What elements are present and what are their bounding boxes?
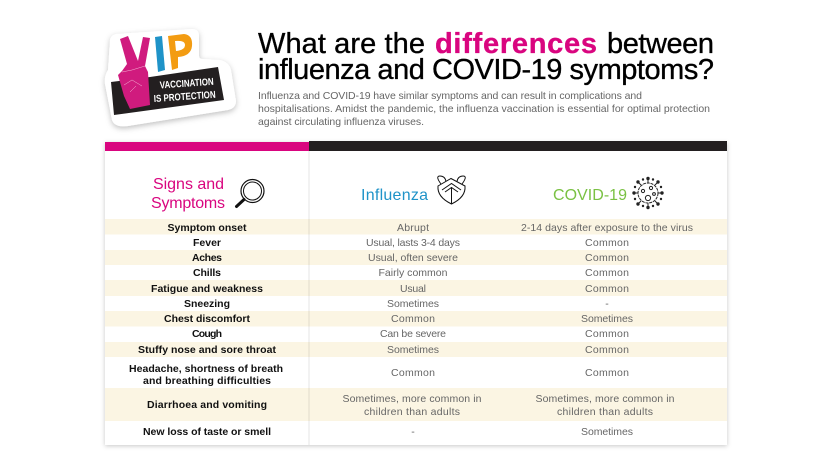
column: signs and symptoms labels: and breathing difficulties	[143, 375, 271, 387]
heading: influenza: Influenza	[361, 187, 428, 204]
header bar pink	[105, 142, 309, 151]
column: covid-19 values: children than adults	[557, 406, 653, 418]
column: signs and symptoms labels: Cough	[192, 328, 222, 340]
column: influenza values: Sometimes	[387, 344, 439, 356]
column: covid-19 values: -	[605, 298, 609, 310]
column: signs and symptoms labels: Aches	[192, 252, 222, 264]
column: signs and symptoms labels: Fever	[193, 237, 221, 249]
column: covid-19 values: Common	[585, 237, 629, 249]
header bar black	[309, 141, 727, 151]
title: influenza and COVID-19 symptoms?	[258, 54, 714, 86]
column: influenza values: Usual, often severe	[368, 252, 458, 264]
title: between	[607, 28, 714, 60]
column: covid-19 values: Common	[585, 267, 629, 279]
logo text: VACCINATION	[159, 77, 214, 91]
column: influenza values	[342, 222, 482, 438]
column: covid-19 values	[521, 222, 693, 438]
column: covid-19 values: Common	[585, 252, 629, 264]
intro text	[258, 90, 710, 128]
title: What are the	[258, 28, 425, 60]
panel: comparison table	[105, 141, 727, 445]
logo letter I	[155, 36, 165, 72]
logo letter V and hand	[118, 36, 150, 109]
column: signs and symptoms labels: New loss of taste or smell	[143, 426, 271, 438]
icon: virus	[632, 177, 664, 209]
intro text: against circulating influenza viruses.	[258, 116, 424, 128]
intro text: Influenza and COVID-19 have similar symptoms and can result in complications and	[258, 90, 642, 102]
intro text: hospitalisations. Amidst the pandemic, the influenza vaccination is essential for optimal protection	[258, 103, 710, 115]
column: covid-19 values: Common	[585, 283, 629, 295]
column: influenza values: Sometimes	[387, 298, 439, 310]
column: influenza values: -	[411, 426, 415, 438]
title: differences	[435, 28, 597, 60]
column: signs and symptoms labels: Headache, shortness of breath	[129, 363, 283, 375]
logo: VIP vaccination is protection sticker	[105, 29, 236, 126]
heading: signs and symptoms: Signs and	[153, 176, 224, 193]
column: influenza values: Can be severe	[380, 328, 446, 340]
column: influenza values: Fairly common	[378, 267, 448, 279]
column: signs and symptoms labels: Chills	[193, 267, 221, 279]
column: signs and symptoms labels: Diarrhoea and vomiting	[147, 399, 267, 411]
row stripes	[105, 219, 727, 421]
heading: signs and symptoms	[151, 176, 225, 212]
column: covid-19 values: Common	[585, 367, 629, 379]
column: covid-19 values: Common	[585, 328, 629, 340]
column: influenza values: Sometimes, more common in	[342, 393, 482, 405]
title	[258, 28, 714, 86]
column: signs and symptoms labels: Stuffy nose and sore throat	[138, 344, 276, 356]
logo text: IS PROTECTION	[153, 90, 216, 105]
logo letter P	[168, 34, 192, 70]
column: covid-19 values: Sometimes	[581, 426, 633, 438]
column divider shade	[308, 151, 310, 445]
column: influenza values: Common	[391, 367, 435, 379]
column: influenza values: children than adults	[364, 406, 460, 418]
heading: signs and symptoms: Symptoms	[151, 195, 225, 212]
column: covid-19 values: Sometimes, more common in	[536, 393, 675, 405]
column: signs and symptoms labels: Sneezing	[184, 298, 230, 310]
column: signs and symptoms labels: Chest discomfort	[164, 313, 250, 325]
column: influenza values: Common	[391, 313, 435, 325]
column: signs and symptoms labels: Symptom onset	[168, 222, 247, 234]
column: signs and symptoms labels: Fatigue and weakness	[151, 283, 263, 295]
heading: covid-19: COVID-19	[553, 187, 627, 204]
logo banner	[111, 67, 224, 115]
column: signs and symptoms labels	[129, 222, 283, 438]
column: covid-19 values: Sometimes	[581, 313, 633, 325]
column: covid-19 values: Common	[585, 344, 629, 356]
icon: face mask	[438, 176, 465, 204]
column: influenza values: Usual	[400, 283, 426, 295]
column: influenza values: Usual, lasts 3-4 days	[366, 237, 460, 249]
column: influenza values: Abrupt	[397, 222, 429, 234]
icon: magnifying glass	[236, 180, 264, 206]
column: covid-19 values: 2-14 days after exposure to the virus	[521, 222, 693, 234]
logo text	[153, 77, 216, 105]
